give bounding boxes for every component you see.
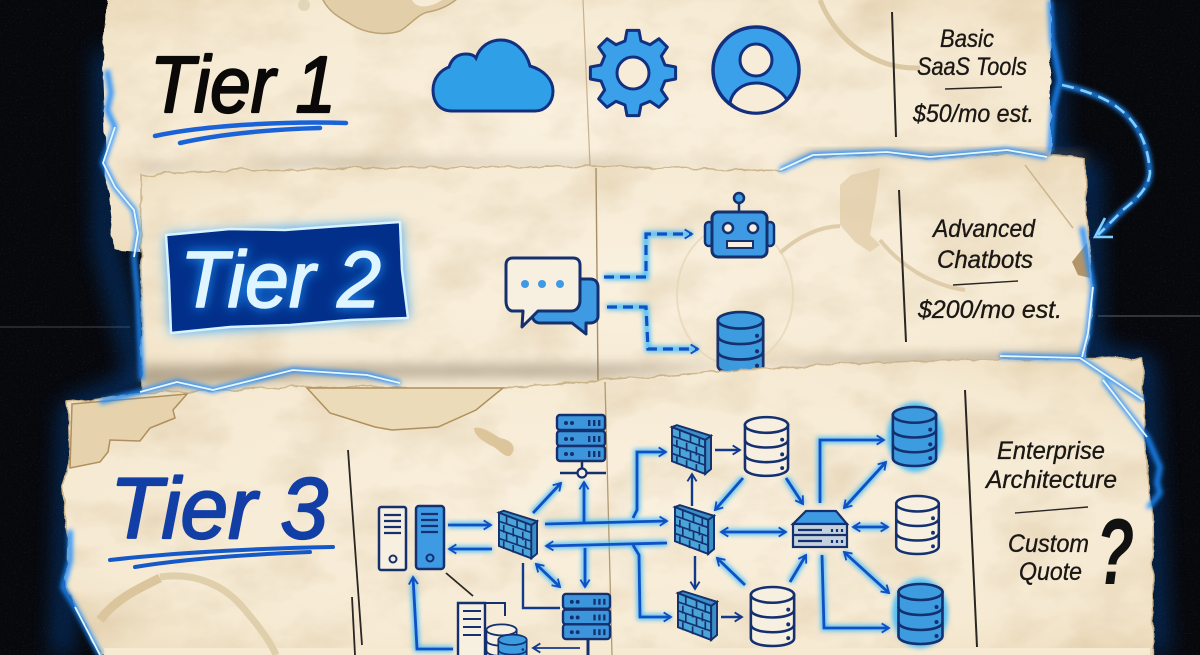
text block: tier 2 price: $200/mo est. — [917, 296, 1062, 324]
heading: tier 2 glowing badge: Tier 2 — [180, 235, 381, 324]
text block: tier 1 price — [912, 25, 1034, 128]
icon: robot — [705, 193, 774, 257]
icon: tower servers — [379, 506, 444, 570]
icon: firewalls — [499, 425, 717, 640]
icon: chat bubbles — [506, 258, 598, 334]
divider tier 3 right — [965, 390, 977, 647]
blue connectors — [413, 440, 889, 649]
dashed arrows to robot and database — [604, 234, 698, 349]
icon: user — [713, 27, 799, 113]
divider tier 2 — [899, 190, 906, 342]
text block: tier 3 price: Custom — [1008, 530, 1089, 558]
icon: outlined databases — [745, 417, 939, 646]
text block: tier 2 price: Advanced — [931, 215, 1036, 243]
text block: tier 2 price — [917, 215, 1062, 324]
fold line tier 1 — [583, 0, 590, 165]
coffee stain top — [298, 0, 458, 33]
icon: filled databases — [887, 402, 948, 648]
icon: gear — [590, 30, 676, 116]
divider tier 1 — [892, 12, 896, 137]
text block: tier 1 price: SaaS Tools — [917, 53, 1027, 81]
heading: tier 3: Tier 3 — [110, 461, 328, 557]
dashed curved arrow from tier 1 to tier 2 — [1062, 85, 1150, 237]
heading: tier 2 glowing badge — [166, 222, 408, 333]
panel: tier 1 paper — [102, 0, 1051, 252]
icon: database tier 2 — [718, 312, 763, 374]
network diagram — [379, 402, 948, 655]
fold line tier 3 — [605, 382, 612, 655]
scorch marks tier 3 — [70, 388, 514, 655]
heading: tier 1: Tier 1 — [150, 40, 336, 129]
icon: cloud — [433, 40, 553, 111]
text block: tier 2 price: Chatbots — [937, 246, 1033, 274]
dark connectors — [446, 450, 742, 648]
icon: bottom server group — [458, 603, 527, 655]
shadow under tier 3 — [142, 352, 1085, 388]
fold line tier 2 — [596, 168, 598, 380]
icon: rack top — [557, 415, 606, 478]
coffee stains tier 2 — [677, 165, 1090, 365]
text block: tier 3 price: Quote — [1019, 558, 1082, 586]
heading: tier 2 glowing badge: Tier 2 — [180, 235, 381, 324]
text block: tier 3 price — [984, 437, 1134, 604]
panel: tier 3 paper — [62, 358, 1154, 655]
icon: network switch — [793, 511, 847, 547]
icon: rack bottom — [563, 594, 610, 655]
text block: tier 1 price: $50/mo est. — [912, 100, 1034, 128]
text block: tier 3 price: Enterprise — [997, 437, 1105, 465]
panel: tier 2 paper — [141, 153, 1093, 400]
divider tier 3 left — [348, 450, 362, 655]
text block: tier 1 price: Basic — [940, 25, 994, 53]
text block: tier 3 price: Architecture — [984, 466, 1117, 494]
connector glow — [413, 440, 889, 649]
shadow under tier 2 — [141, 152, 1085, 170]
coffee ring tier 1 — [820, 0, 920, 68]
question mark: ? — [1096, 499, 1134, 604]
